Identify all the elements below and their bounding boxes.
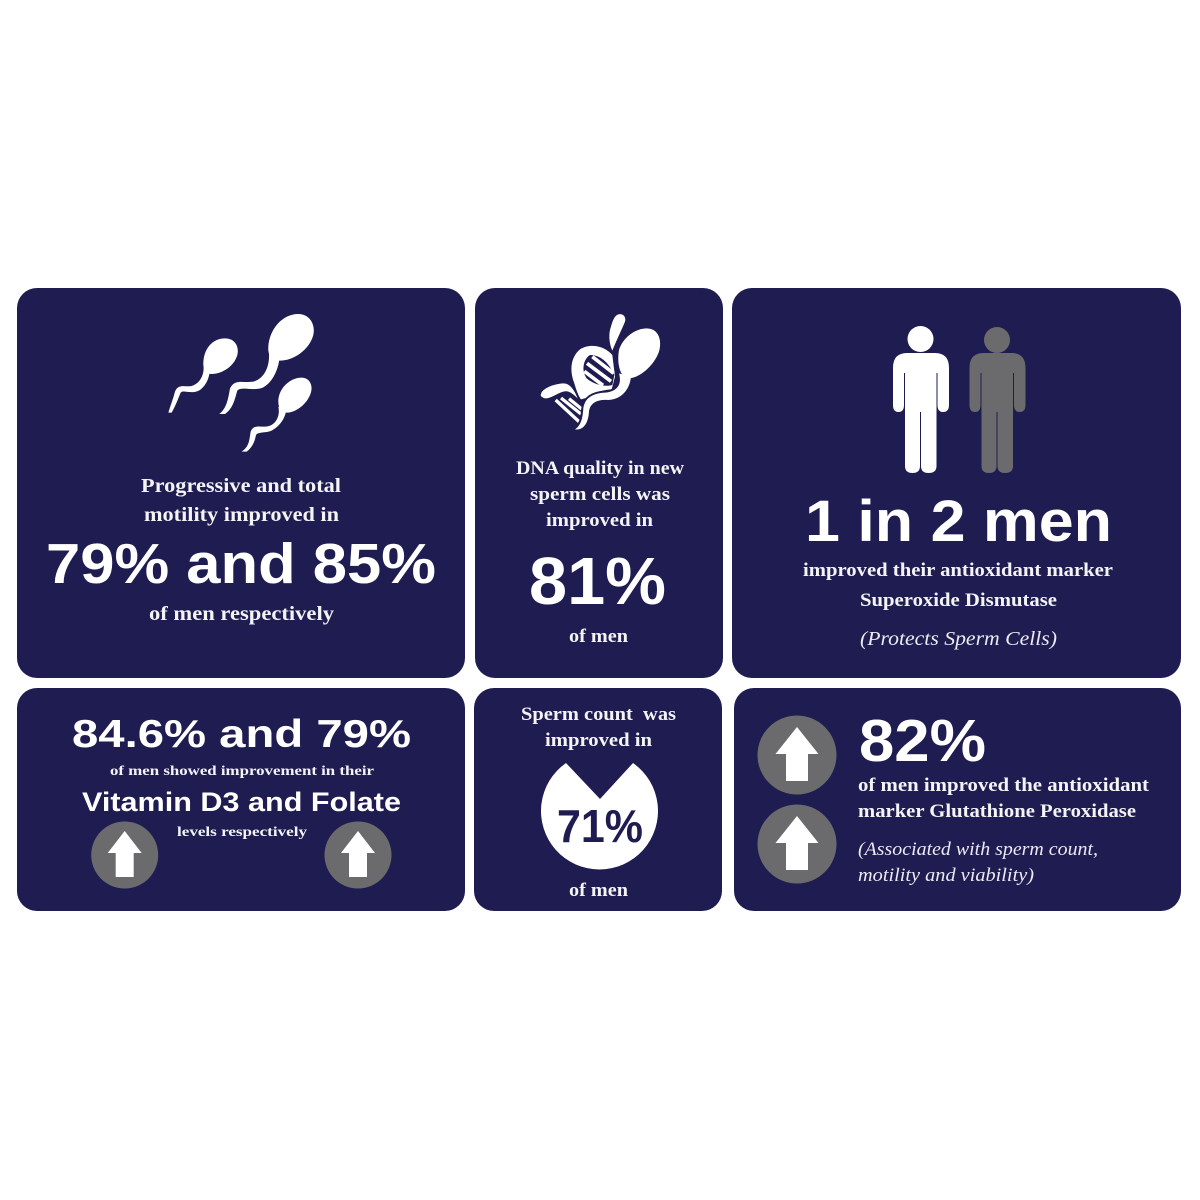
text: motility description line 1: Progressive and total	[141, 475, 341, 497]
stat: 81%: 81%	[529, 544, 666, 619]
panel: sperm count	[474, 688, 722, 911]
icon: up arrow top	[758, 716, 836, 794]
stat: 71%: 71%	[557, 800, 643, 852]
text: antioxidant marker line 1: improved their antioxidant marker	[803, 560, 1114, 581]
icon: up arrow right	[324, 822, 392, 888]
stat: 84.6% and 79%: 84.6% and 79%	[72, 713, 411, 756]
text: glutathione line 2: marker Glutathione Peroxidase	[858, 801, 1136, 822]
text: of men respectively: of men respectively	[149, 603, 334, 625]
text: sperm count line 1: Sperm count was	[521, 704, 676, 725]
text: of men showed improvement: of men showed improvement in their	[110, 764, 374, 779]
stat: 1 in 2 men: 1 in 2 men	[805, 489, 1112, 554]
icon: white man figure	[893, 326, 949, 473]
panel background: superoxide dismutase	[732, 288, 1181, 678]
text: DNA description line 1: DNA quality in new	[516, 458, 684, 479]
text: associated note line 2: motility and viability)	[858, 865, 1034, 886]
panel background: sperm count	[474, 688, 722, 911]
panel: DNA quality	[475, 288, 723, 678]
icon: up arrow left	[91, 822, 158, 888]
text: levels respectively: levels respectively	[177, 825, 307, 840]
heading: Vitamin D3 and Folate: Vitamin D3 and Folate	[82, 787, 401, 817]
text: of men: of men	[569, 880, 628, 901]
text: glutathione line 1: of men improved the antioxidant	[858, 775, 1150, 796]
text: sperm count line 2: improved in	[545, 730, 652, 751]
stat: 79% and 85%: 79% and 85%	[46, 532, 436, 596]
panel background: glutathione peroxidase	[734, 688, 1181, 911]
icon: DNA helix with sperm cell	[541, 314, 660, 429]
text: associated note line 1: (Associated with sperm count,	[858, 839, 1098, 860]
panel: motility	[17, 288, 465, 678]
panel: glutathione peroxidase	[734, 688, 1181, 911]
text: protects sperm cells note: (Protects Sperm Cells)	[860, 628, 1057, 650]
text: DNA description line 2: sperm cells was	[530, 484, 670, 505]
text: antioxidant marker line 2: Superoxide Dismutase	[860, 590, 1057, 611]
text: DNA description line 3: improved in	[546, 510, 653, 531]
icon: three sperm cells	[168, 314, 314, 452]
text: motility description line 2: motility improved in	[144, 504, 339, 526]
panel background: motility	[17, 288, 465, 678]
icon: grey man figure	[970, 327, 1026, 473]
panel: superoxide dismutase	[732, 288, 1181, 678]
icon: up arrow bottom	[758, 804, 836, 884]
panel: vitamin D3 and folate	[17, 688, 465, 911]
text: of men: of men	[569, 626, 628, 647]
chart: 71% pie with missing slice	[541, 763, 658, 869]
panel background: vitamin D3 and folate	[17, 688, 465, 911]
stat: 82%: 82%	[859, 708, 986, 774]
panel background: DNA quality	[475, 288, 723, 678]
